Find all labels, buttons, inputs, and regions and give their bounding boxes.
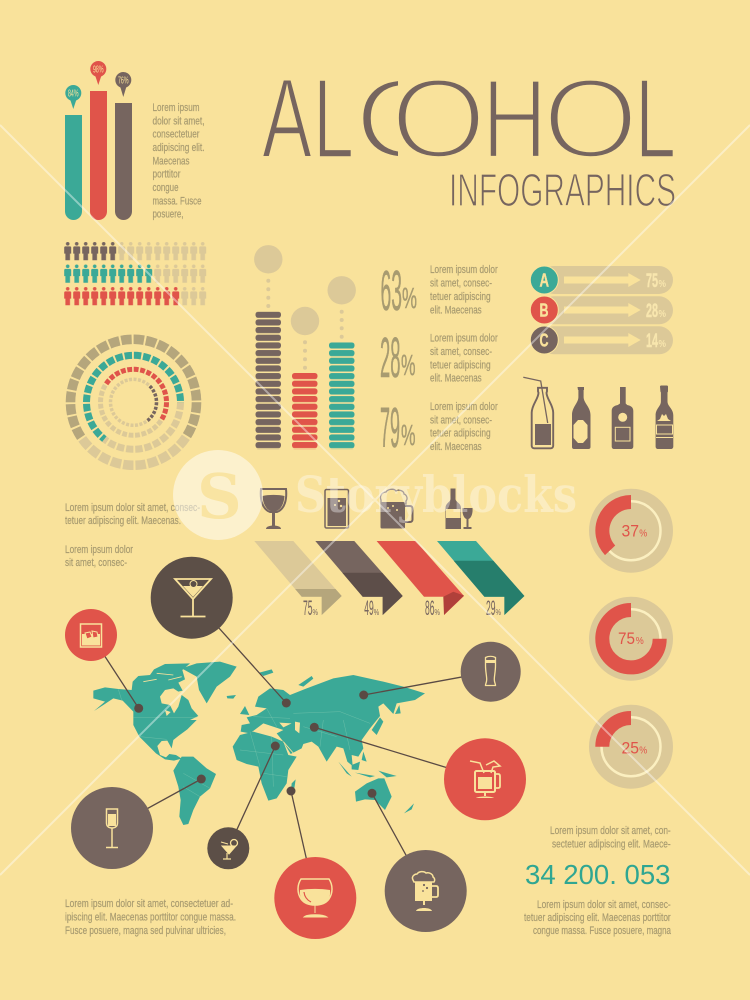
- text: 28% description: tetuer adipiscing: [430, 359, 491, 371]
- pill: C 14%: %: [658, 339, 666, 350]
- chart: donut 37%: [589, 489, 673, 573]
- text: 79% description: tetuer adipiscing: [430, 428, 491, 440]
- chart: donut 25%: [589, 705, 673, 789]
- text: right paragraph below number: Lorem ipsum dolor sit amet, consec-: [537, 899, 671, 911]
- chart: donut 75%: 75: [618, 629, 635, 648]
- pill: B 28%: [530, 296, 673, 324]
- text: tube description: Lorem ipsum: [152, 102, 200, 114]
- icon: beer glass: [325, 490, 348, 528]
- icon: champagne bottle: [656, 386, 673, 449]
- stat: 79%: %: [401, 420, 416, 452]
- stat: 63%: %: [402, 283, 417, 315]
- watermark: logo: S: [197, 460, 242, 533]
- chart: test tubes: [65, 61, 132, 220]
- text: 63% description: sit amet, consec-: [430, 278, 492, 290]
- pill: B 28%: B: [540, 300, 548, 320]
- text: tube description: dolor sit amet,: [152, 115, 204, 127]
- chart: donut 37%: 37: [622, 522, 639, 541]
- land: Madagascar: [291, 779, 296, 794]
- ribbon: brown 49%: %: [374, 608, 379, 617]
- chart: donut 37%: %: [639, 528, 647, 540]
- text: left short paragraph: Lorem ipsum dolor: [65, 544, 133, 556]
- stat: 28%: [380, 326, 416, 390]
- ribbon: red 86%: 86: [425, 597, 434, 620]
- title: ALCOHOL: O: [390, 56, 486, 182]
- callout: champagne flute: [71, 787, 153, 869]
- callout: whisky glass: [65, 609, 117, 661]
- title: ALCOHOL: L: [313, 56, 354, 182]
- text: tube description: Maecenas: [152, 155, 190, 167]
- text: 79% description: elit. Maecenas: [430, 441, 482, 453]
- icon: bottle and glass: [446, 488, 473, 529]
- title: ALCOHOL: H: [482, 56, 547, 182]
- stat: 28%: %: [401, 350, 416, 382]
- tube: red 98: [90, 61, 107, 220]
- chart: A B C pills: [530, 266, 673, 354]
- chart: world map: [93, 662, 425, 825]
- text: 28% description: elit. Maecenas: [430, 373, 482, 385]
- text: left short paragraph: [65, 544, 133, 569]
- chart: donut 75%: [589, 597, 673, 681]
- ribbon: teal 29%: [437, 541, 524, 620]
- text: 28% description: [430, 333, 498, 385]
- text: left mid paragraph: Lorem ipsum dolor sit amet, consec-: [65, 502, 200, 514]
- callout: foamy beer mug: [385, 850, 467, 932]
- text: tube description: massa. Fusce: [152, 195, 202, 207]
- pill: B 28%: %: [658, 309, 666, 320]
- text: 63% description: [430, 264, 498, 316]
- land: North America: [93, 663, 198, 761]
- ribbon: brown 49%: 49: [364, 597, 374, 620]
- callout: irish coffee with umbrella: [444, 738, 526, 820]
- watermark: diagonal lines: [0, 125, 750, 875]
- stat: 63%: 63: [380, 259, 402, 323]
- chart: people rows: [63, 242, 207, 306]
- stat: 28%: 28: [380, 326, 400, 390]
- land: Greenland: [182, 662, 237, 703]
- text: tube description: adipiscing elit.: [152, 142, 204, 154]
- watermark: logo: Storyblocks: [295, 465, 577, 524]
- text: right paragraph below number: [524, 899, 671, 937]
- callout: wine goblet: [274, 857, 356, 939]
- stat: 79%: 79: [380, 396, 400, 460]
- land: Africa: [233, 732, 297, 801]
- tube: brown 76: 76%: [118, 76, 129, 86]
- stack: brown: [254, 245, 282, 450]
- text: 79% description: Lorem ipsum dolor: [430, 401, 498, 413]
- ribbon: red 86%: %: [434, 608, 440, 617]
- callout: cocktail: [207, 827, 249, 869]
- pill: B 28%: 28: [646, 301, 658, 322]
- title: ALCOHOL: C: [354, 56, 450, 182]
- title: ALCOHOL: [263, 80, 673, 156]
- tube: teal 84: 84%: [68, 88, 79, 100]
- tube: brown 76: [115, 72, 132, 220]
- chart: chevron ribbons: [254, 541, 524, 620]
- text: right paragraph above number: Lorem ipsum dolor sit amet, con-: [550, 825, 671, 837]
- pill: A 75%: %: [658, 279, 666, 290]
- land: Eurasia: [241, 675, 425, 766]
- map connector lines: [91, 598, 491, 898]
- stat: 79%: [380, 396, 416, 460]
- chart: donut 25%: %: [639, 744, 647, 756]
- tube: red 98: 98%: [93, 64, 104, 76]
- pill: C 14%: 14: [646, 331, 658, 352]
- text: right paragraph above number: [550, 825, 671, 850]
- text: bottom left paragraph: Fusce posuere, magna sed pulvinar ultricies,: [65, 925, 226, 937]
- text: tube description: congue: [152, 182, 178, 194]
- icon: whisky bottle: [612, 387, 633, 449]
- text: tube description: posuere,: [152, 209, 184, 221]
- text: tube description: porttitor: [152, 169, 181, 181]
- text: 63% description: elit. Maecenas: [430, 304, 482, 316]
- land: South America: [173, 757, 216, 825]
- title: ALCOHOL: O: [542, 56, 638, 182]
- ribbon: tan 75%: 75: [303, 597, 312, 620]
- pill: C 14%: [530, 326, 673, 354]
- text: left mid paragraph: [65, 502, 200, 527]
- map location dots: [134, 690, 376, 798]
- text: 63% description: Lorem ipsum dolor: [430, 264, 498, 276]
- pill: C 14%: C: [540, 330, 548, 350]
- text: right paragraph below number: congue massa. Fusce posuere, magna: [533, 925, 671, 937]
- text: left short paragraph: sit amet, consec-: [65, 557, 127, 569]
- chart: stacked coin bars: [254, 245, 356, 450]
- big number: 34 200. 053: [525, 859, 670, 890]
- chart: radial segmented rings: [70, 339, 196, 465]
- tube: teal 84: [65, 85, 82, 220]
- icon: milk bottle with straw: [523, 377, 553, 448]
- ribbon: teal 29%: %: [496, 608, 501, 617]
- text: 79% description: sit amet, consec-: [430, 414, 492, 426]
- title: ALCOHOL: A: [262, 56, 312, 182]
- pill: A 75%: 75: [646, 271, 658, 292]
- icon: wine glass: [261, 489, 286, 529]
- text: 79% description: [430, 401, 498, 453]
- watermark: logo: [173, 450, 577, 540]
- ribbon: teal 29%: 29: [486, 597, 496, 620]
- text: 28% description: Lorem ipsum dolor: [430, 333, 498, 345]
- land: islands: [227, 669, 414, 813]
- text: right paragraph above number: sectetuer adipiscing elit. Maece-: [552, 838, 671, 850]
- stack: teal: [328, 276, 356, 450]
- arctic channels: [143, 673, 295, 755]
- text: left mid paragraph: tetuer adipiscing elit. Maecenas.: [65, 515, 181, 527]
- stat: 63%: [380, 259, 417, 323]
- text: right paragraph below number: tetuer adipiscing elit. Maecenas porttitor: [524, 912, 671, 924]
- chart: donut 25%: 25: [622, 738, 639, 757]
- pill: A 75%: [530, 266, 673, 294]
- text: tube description: [152, 102, 204, 221]
- ribbon: brown 49%: [315, 541, 403, 620]
- pill: A 75%: A: [540, 270, 549, 290]
- text: bottom left paragraph: ipiscing elit. Maecenas porttitor congue massa.: [65, 912, 236, 924]
- borders: [118, 689, 370, 797]
- callout: martini: [151, 557, 233, 639]
- land: Australia: [355, 778, 392, 810]
- ribbon: tan 75%: %: [312, 608, 318, 617]
- icon: beer mug: [380, 489, 412, 528]
- text: 63% description: tetuer adipiscing: [430, 291, 491, 303]
- ribbon: tan 75%: [254, 541, 342, 620]
- chart: donut 75%: %: [636, 635, 644, 647]
- text: bottom left paragraph: [65, 898, 236, 937]
- text: tube description: consectetuer: [152, 129, 200, 141]
- ribbon: red 86%: [377, 541, 464, 620]
- text: 28% description: sit amet, consec-: [430, 346, 492, 358]
- callout: tall beer: [461, 642, 521, 702]
- stack: red: [291, 307, 319, 450]
- icon: beer bottle: [572, 387, 590, 449]
- title: ALCOHOL: L: [635, 56, 676, 182]
- seas: [165, 710, 300, 733]
- text: bottom left paragraph: Lorem ipsum dolor sit amet, consectetuer ad-: [65, 898, 233, 910]
